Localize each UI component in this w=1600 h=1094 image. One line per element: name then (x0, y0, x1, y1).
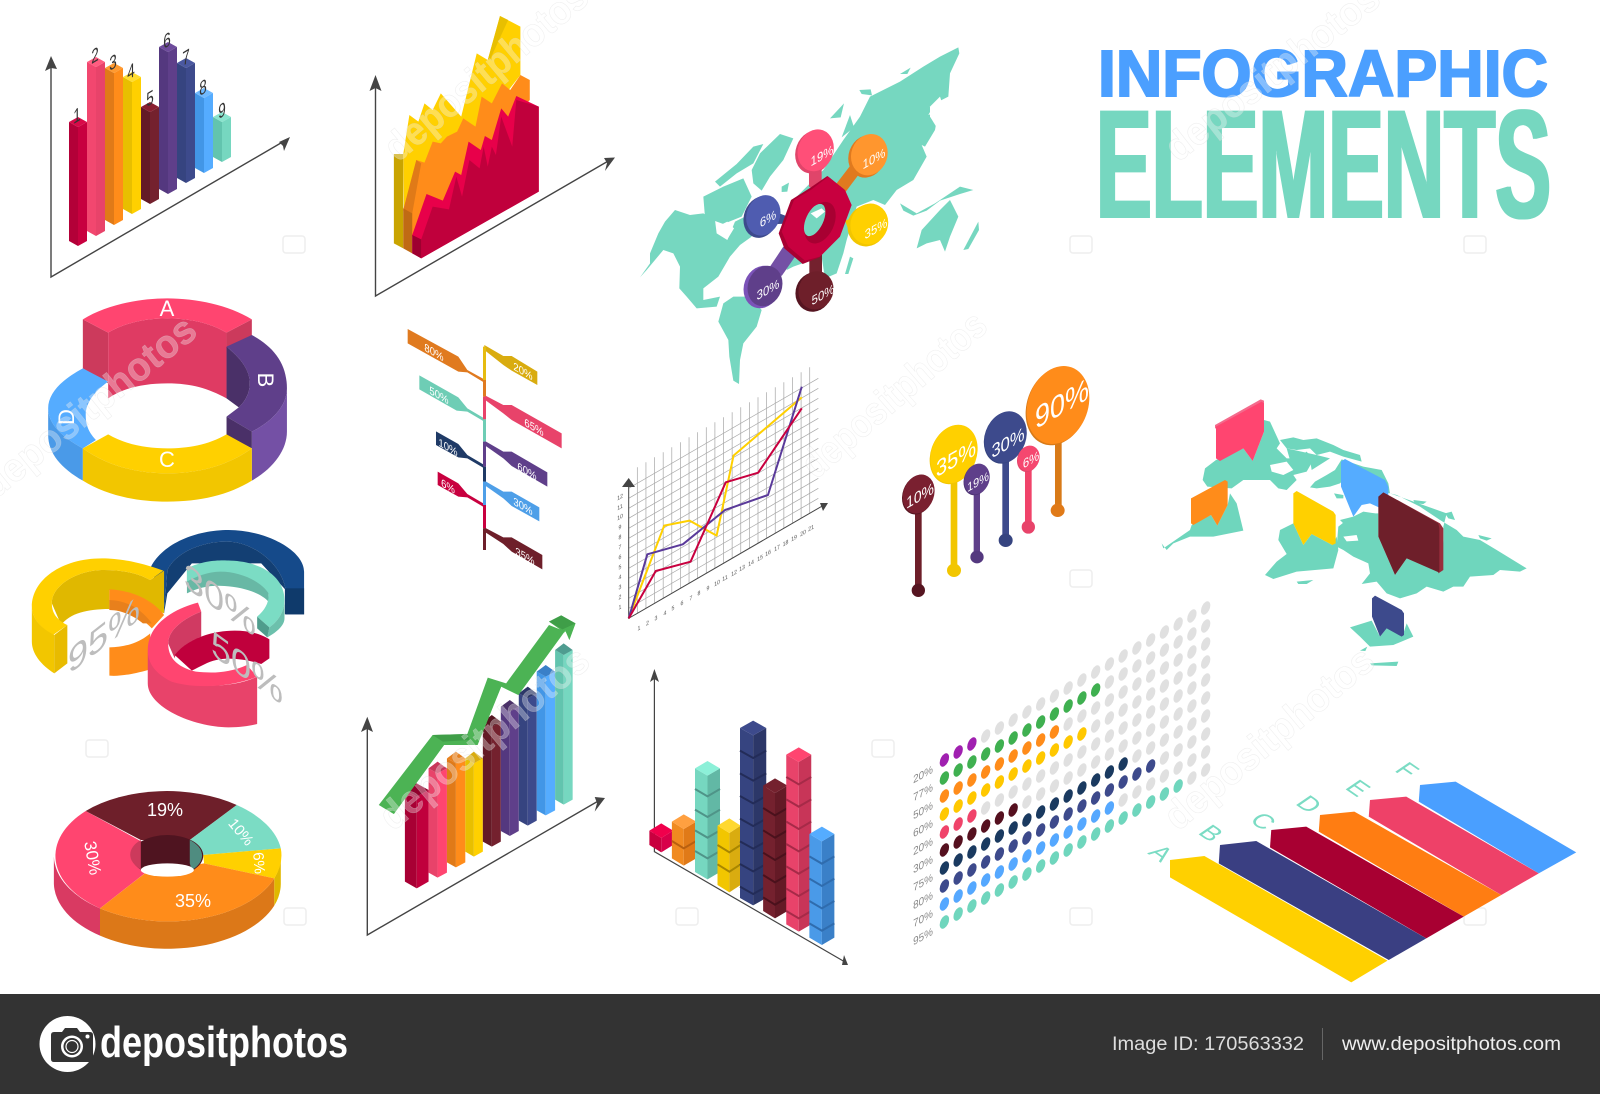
sector labels: 10% (224, 815, 257, 849)
marker labels: 35% (936, 434, 976, 482)
sector 6% (203, 848, 281, 878)
title (1096, 36, 1551, 252)
logo icon (40, 1016, 96, 1072)
y axis labels: 11 (617, 503, 623, 513)
marker 90% (1015, 357, 1100, 517)
row labels: 75% (913, 872, 933, 894)
bubble: orange (1191, 480, 1228, 526)
flag labels (424, 342, 544, 569)
bar number labels: 1 (73, 102, 81, 129)
axes (45, 56, 290, 277)
marker 6% (1013, 442, 1043, 534)
stack: maroon (763, 778, 788, 918)
bar number labels: 6 (163, 27, 171, 54)
y axis labels (617, 493, 623, 612)
bubble: pink (1215, 399, 1264, 461)
pin labels: 50% (812, 280, 835, 308)
marker labels: 90% (1035, 371, 1089, 436)
yellow ring (32, 558, 164, 673)
logo wordmark: depositphotos (100, 1018, 348, 1067)
ribbon strips A to F (1142, 758, 1576, 982)
ring letters: D (54, 409, 79, 425)
x axis labels: 21 (808, 524, 814, 534)
marker labels: 30% (991, 423, 1025, 463)
row labels: 20% (913, 764, 933, 786)
ring letters (54, 296, 278, 472)
sector 35% (100, 863, 274, 921)
segment B (227, 335, 287, 481)
x axis labels: 5 (672, 605, 675, 613)
flag labels: 65% (524, 417, 544, 440)
white sea patches (1270, 462, 1358, 541)
row labels: 30% (913, 854, 933, 876)
row labels: 77% (913, 782, 933, 804)
x axis labels: 18 (783, 539, 789, 549)
sector labels (80, 800, 268, 911)
pin: 30% (738, 260, 788, 314)
sector 19% (86, 791, 237, 840)
pin: 19% (789, 124, 840, 179)
teal ring (187, 560, 284, 637)
sector labels: 30% (80, 840, 105, 876)
crimson ring (175, 631, 269, 671)
ribbon letters: D (1290, 791, 1328, 818)
flag labels: 80% (424, 342, 444, 365)
marker labels: 19% (967, 469, 989, 495)
x axis labels: 7 (690, 595, 693, 603)
pin labels: 10% (863, 144, 886, 172)
data lines (629, 387, 802, 618)
stack: blue (809, 827, 834, 945)
bar number labels: 2 (91, 42, 99, 69)
image id: Image ID: 170563332 (1112, 1034, 1304, 1055)
row labels (913, 764, 933, 948)
pin labels: 19% (811, 141, 834, 169)
layers (394, 16, 539, 258)
marker 30% (977, 405, 1034, 547)
y axis labels: 12 (617, 493, 623, 503)
bars (405, 643, 573, 888)
y axis labels: 2 (619, 594, 622, 602)
x axis labels: 4 (664, 610, 667, 618)
ribbon letters: E (1339, 776, 1376, 801)
map landmass (1162, 420, 1527, 666)
sector 30% (55, 811, 167, 908)
stack: teal (695, 761, 720, 879)
depositphotos watermark text: depositphotos (371, 638, 598, 839)
marker 19% (959, 460, 994, 563)
segment D (48, 368, 108, 481)
bubble: indigo (1372, 596, 1404, 637)
lollipop percentage markers (897, 357, 1100, 597)
bar number labels (73, 27, 226, 129)
pin labels: 35% (865, 214, 888, 242)
y axis labels: 1 (619, 604, 622, 612)
sector labels: 35% (175, 891, 211, 911)
row labels: 95% (913, 926, 933, 948)
flag labels: 30% (513, 496, 533, 519)
vertical stem (483, 347, 486, 550)
white sea patches (717, 97, 945, 239)
ring letters: B (253, 373, 278, 387)
y axis labels: 4 (619, 574, 622, 582)
pin: 50% (790, 266, 839, 317)
flag labels: 6% (441, 477, 455, 497)
y axis labels: 6 (619, 554, 622, 562)
flag timeline (408, 329, 562, 569)
grid axes (622, 478, 828, 618)
x axis labels: 6 (681, 600, 684, 608)
stack: yellow (718, 818, 741, 892)
world map with percentage hub (640, 47, 979, 384)
right flags (484, 345, 562, 569)
bar number labels: 8 (199, 74, 207, 101)
hub stems (770, 166, 860, 277)
title line 1: INFOGRAPHIC (1098, 36, 1548, 112)
hub nut (779, 176, 852, 264)
depositphotos watermark text: depositphotos (1156, 638, 1383, 839)
ring percentages: 30% (184, 553, 256, 646)
line chart on isometric grid (617, 362, 828, 633)
donut pie chart (54, 791, 281, 949)
ribbon letters: A (1142, 841, 1179, 866)
y axis labels: 8 (619, 534, 622, 542)
row labels: 50% (913, 800, 933, 822)
left flags (408, 329, 484, 507)
marker 10% (897, 470, 940, 597)
area chart: layered 3D mountain (370, 16, 615, 296)
bar number labels: 7 (182, 44, 190, 71)
world map with speech bubbles (1162, 399, 1527, 666)
navy ring (151, 530, 304, 614)
y axis labels: 9 (619, 524, 622, 532)
ribbon letters: F (1389, 758, 1424, 783)
flag labels: 60% (517, 461, 537, 484)
depositphotos watermark text: depositphotos (793, 303, 995, 487)
stack: pink (786, 747, 811, 932)
pin labels (757, 141, 888, 308)
x axis labels (638, 524, 814, 633)
bubble: yellow (1293, 491, 1336, 545)
footer band (0, 994, 1600, 1094)
ribbon letters: C (1244, 808, 1282, 835)
flag labels: 20% (513, 361, 533, 384)
row labels: 80% (913, 890, 933, 912)
bubble: maroon (1378, 492, 1443, 575)
marker labels: 10% (906, 479, 934, 513)
bar number labels: 4 (127, 58, 135, 85)
coloured value dots (944, 624, 1178, 922)
green arrow (379, 615, 576, 814)
x axis labels: 10 (714, 579, 720, 589)
flag labels: 10% (438, 437, 458, 460)
segment C (83, 434, 252, 502)
y axis labels: 7 (619, 544, 622, 552)
x axis labels: 13 (739, 564, 745, 574)
row labels: 70% (913, 908, 933, 930)
ribbon letters (1142, 758, 1424, 866)
bar chart: numbered 3D bars (45, 27, 290, 277)
grid (629, 362, 818, 618)
segmented ring chart A B C D (48, 296, 287, 502)
y axis labels: 10 (617, 513, 623, 523)
x axis labels: 8 (698, 590, 701, 598)
website: www.depositphotos.com (1341, 1034, 1561, 1055)
axes (361, 717, 605, 935)
ring percentages: 95% (68, 587, 140, 683)
x axis labels: 15 (757, 554, 763, 564)
depositphotos watermark text (0, 0, 1388, 839)
map landmass (640, 47, 979, 384)
x axis labels: 11 (722, 574, 728, 584)
bubble: blue (1341, 459, 1388, 517)
marker labels (906, 371, 1089, 513)
sector labels: 19% (147, 800, 183, 820)
ring percentages (68, 553, 283, 714)
sector labels: 6% (249, 852, 268, 875)
stack: navy (740, 721, 766, 905)
flag labels: 35% (515, 546, 535, 569)
x axis labels: 14 (748, 559, 754, 569)
ring letters: C (159, 447, 175, 472)
x axis labels: 3 (655, 615, 658, 623)
orange ring (109, 589, 164, 676)
overlapping ring charts with percentages (32, 530, 304, 727)
bar number labels: 9 (218, 97, 226, 124)
sector 10% (190, 805, 281, 855)
x axis labels: 12 (731, 569, 737, 579)
watermark camera icons (86, 236, 1486, 925)
cube stack chart (649, 669, 848, 965)
dot matrix chart (913, 608, 1206, 948)
grey background dots (944, 608, 1206, 922)
ring letters: A (160, 296, 175, 321)
pin: 35% (842, 198, 894, 252)
bars 1 to 9 (69, 42, 231, 246)
bar number labels: 3 (109, 49, 117, 76)
donut walls (54, 857, 281, 949)
segment A (83, 298, 252, 398)
x axis labels: 16 (765, 549, 771, 559)
ring percentages: 50% (211, 621, 283, 714)
stack: orange (672, 814, 696, 866)
stack: crimson (649, 823, 673, 852)
x axis labels: 17 (774, 544, 780, 554)
axes (650, 669, 848, 965)
axes (370, 75, 615, 296)
donut hole (130, 835, 203, 877)
marker labels: 6% (1023, 447, 1040, 472)
bar number labels: 5 (146, 85, 154, 112)
pin labels: 30% (757, 275, 780, 303)
row labels: 20% (913, 836, 933, 858)
pink ring (148, 603, 257, 727)
x axis labels: 1 (638, 625, 641, 633)
marker 35% (922, 418, 986, 577)
x axis labels: 20 (800, 529, 806, 539)
ribbons (1170, 782, 1576, 982)
pin labels: 6% (760, 206, 777, 231)
bar chart with green arrow (361, 615, 605, 935)
y axis labels: 5 (619, 564, 622, 572)
y axis labels: 3 (619, 584, 622, 592)
pin: 6% (738, 190, 786, 243)
x axis labels: 19 (791, 534, 797, 544)
flag labels: 50% (429, 385, 449, 408)
ribbon letters: B (1192, 821, 1229, 846)
x axis labels: 9 (707, 585, 710, 593)
row labels: 60% (913, 818, 933, 840)
x axis labels: 2 (646, 620, 650, 628)
pin: 10% (842, 129, 893, 183)
